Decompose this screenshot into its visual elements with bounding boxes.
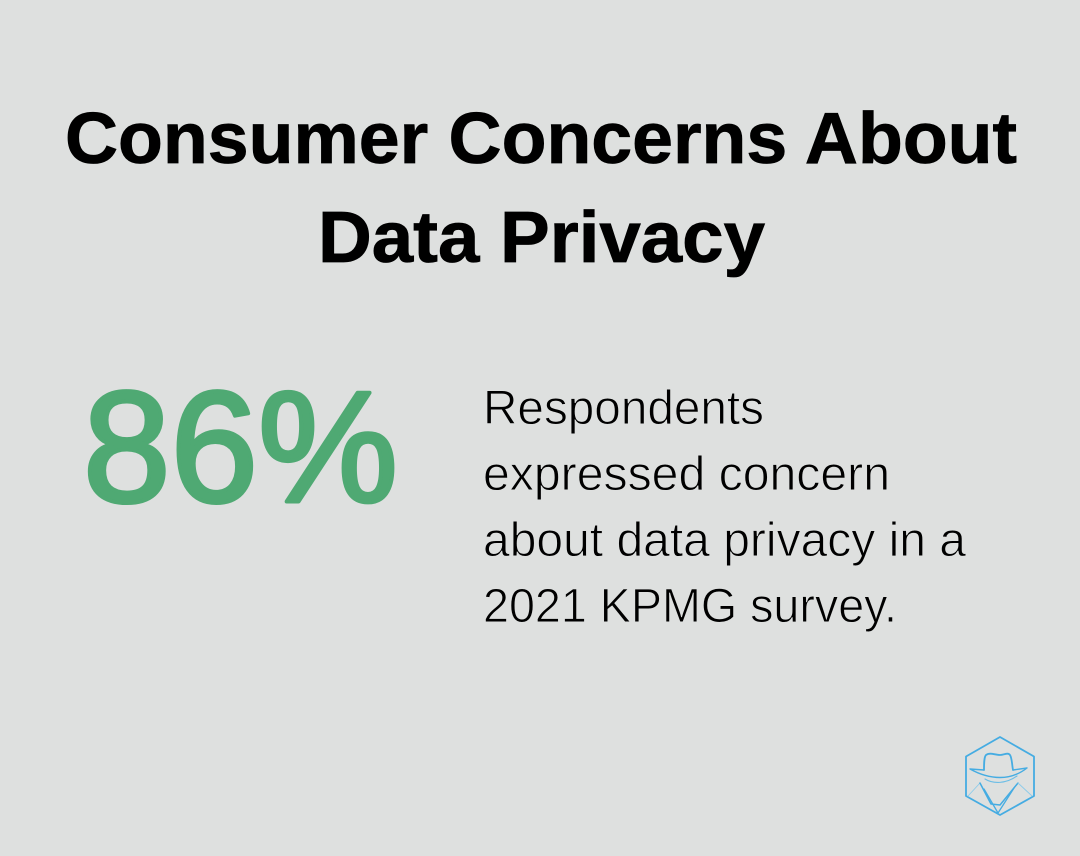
description text: about data privacy in a [483, 514, 966, 567]
description text [483, 382, 966, 633]
title [65, 99, 1017, 278]
title: Data Privacy [318, 198, 765, 278]
icon: hexagon logo with spy hat [966, 737, 1034, 815]
title: Consumer Concerns About [65, 99, 1017, 179]
big statistic: 86%: 86% [83, 360, 398, 536]
description text: expressed concern [483, 448, 890, 501]
description text: Respondents [483, 382, 764, 435]
description text: 2021 KPMG survey. [483, 580, 897, 633]
